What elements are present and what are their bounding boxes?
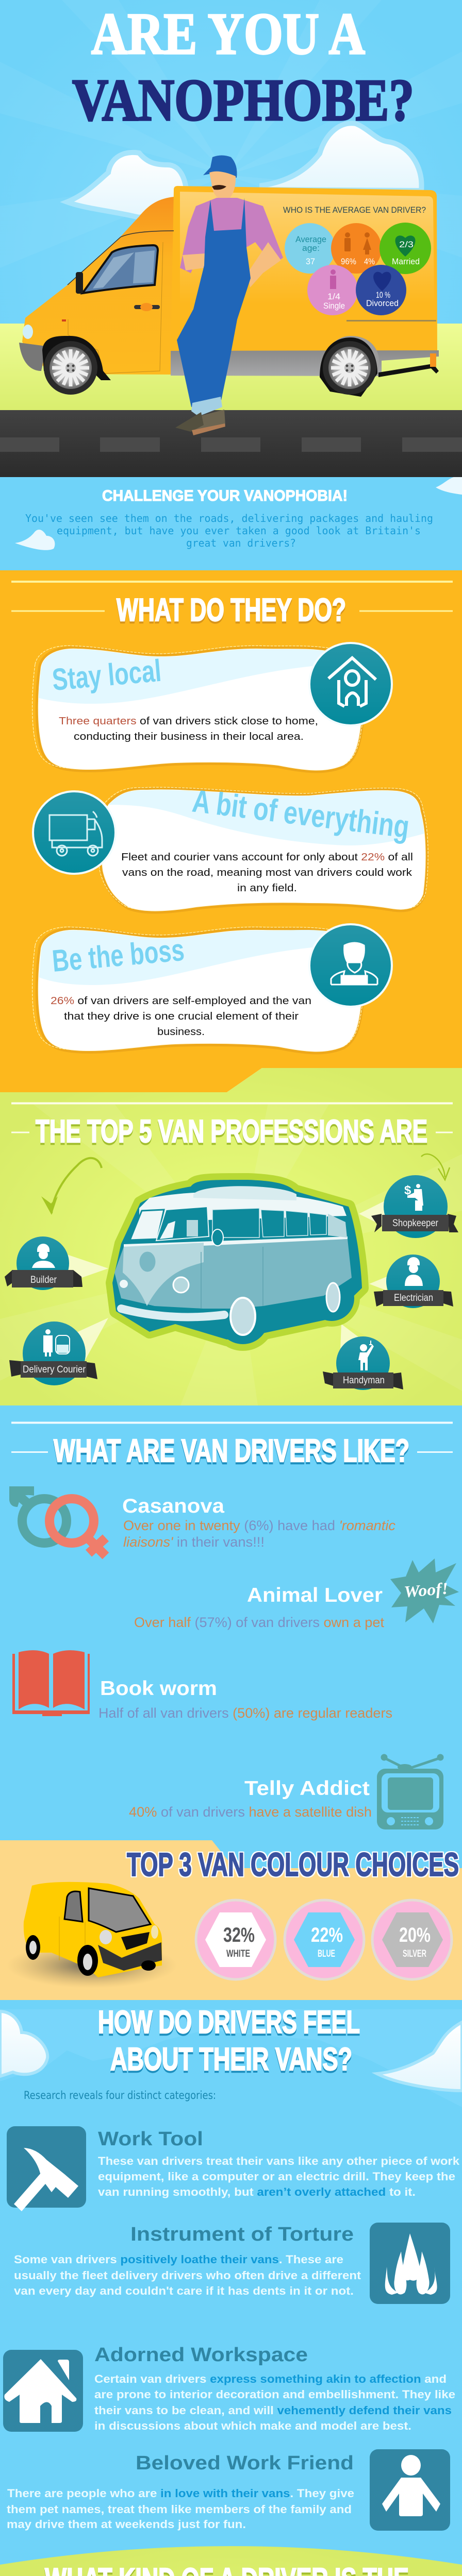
telly addict: 40% of van drivers have a satellite dish bbox=[129, 1804, 372, 1820]
stat: silver vans: SILVER bbox=[403, 1948, 426, 1959]
instrument of torture: van every day and couldn't care if it has dents in it or not. bbox=[14, 2284, 354, 2297]
telly addict: Telly Addict bbox=[244, 1777, 370, 1800]
section: top 5 van professions bbox=[0, 1068, 462, 1405]
casanova: Over one in twenty (6%) have had 'romantic bbox=[123, 1518, 396, 1533]
stat: gender split: 4% bbox=[364, 257, 375, 266]
book worm: Half of all van drivers (50%) are regular readers bbox=[98, 1705, 392, 1721]
profession: delivery courier: Delivery Courier bbox=[23, 1364, 86, 1375]
card text: stay local: conducting their business in their local area. bbox=[74, 731, 304, 742]
card text: stay local: Three quarters of van drivers stick close to home, bbox=[59, 716, 318, 727]
stat: single: 1/4 bbox=[327, 292, 340, 301]
heading: how do drivers feel: ABOUT THEIR VANS? bbox=[110, 2042, 352, 2077]
profession: shopkeeper: $ bbox=[404, 1183, 411, 1197]
card heading: stay local: Stay local bbox=[51, 653, 162, 697]
card: be the boss bbox=[32, 924, 392, 1051]
stat: average age: Average bbox=[295, 234, 326, 244]
van illustration bbox=[19, 186, 439, 397]
icon: house bbox=[3, 2350, 83, 2432]
van heading: who is the average van driver: WHO IS THE AVERAGE VAN DRIVER? bbox=[283, 205, 426, 215]
circle icon: house bbox=[309, 643, 392, 725]
heading: what do they do: WHAT DO THEY DO? bbox=[117, 592, 346, 628]
animal lover: Over half (57%) of van drivers own a pet bbox=[134, 1615, 384, 1630]
circle icon: truck bbox=[33, 791, 116, 874]
instrument of torture: Instrument of Torture bbox=[130, 2224, 354, 2245]
subheading: CHALLENGE YOUR VANOPHOBIA! bbox=[102, 487, 348, 504]
stat: white vans: 32% bbox=[223, 1924, 255, 1946]
profession: shopkeeper: Shopkeeper bbox=[392, 1218, 439, 1229]
stat: divorced bbox=[356, 265, 406, 315]
profession: handyman: Handyman bbox=[343, 1375, 385, 1386]
stat: single bbox=[307, 265, 358, 315]
adorned workspace: Certain van drivers express something akin to affection and bbox=[94, 2372, 447, 2385]
adorned workspace bbox=[94, 2344, 455, 2432]
intro text: You've seen see them on the roads, delivering packages and hauling bbox=[25, 512, 433, 524]
adorned workspace: in discussions about which make and model are best. bbox=[94, 2419, 411, 2432]
stat: married: Married bbox=[392, 257, 420, 266]
stat: gender split bbox=[331, 223, 382, 274]
van driver man bbox=[175, 156, 283, 435]
instrument of torture: Some van drivers positively loathe their vans . These are bbox=[14, 2253, 343, 2266]
profession: builder: Builder bbox=[30, 1275, 57, 1285]
woof burst: Woof! bbox=[403, 1579, 449, 1601]
work tool: van running smoothly, but aren’t overly attached to it. bbox=[98, 2185, 416, 2198]
stat: average age: age: bbox=[302, 243, 320, 253]
beloved work friend bbox=[7, 2452, 354, 2531]
card heading: be the boss: Be the boss bbox=[51, 933, 186, 978]
cloud: left bbox=[67, 152, 187, 217]
research note: Research reveals four distinct categories: bbox=[24, 2089, 216, 2102]
section: what do they do bbox=[0, 570, 462, 1092]
telly addict bbox=[129, 1777, 372, 1820]
arrow: right bbox=[421, 1154, 450, 1180]
book worm bbox=[98, 1677, 392, 1721]
stat: married: 2/3 bbox=[399, 240, 414, 249]
section: what are van drivers like bbox=[0, 1405, 462, 1869]
stat: gender split: 96% bbox=[341, 257, 356, 266]
adorned workspace: are prone to interior decoration and embellishment. They like bbox=[94, 2388, 455, 2401]
bus illustration bbox=[112, 1180, 362, 1344]
intro text: great van drivers? bbox=[186, 537, 296, 549]
card text: stay local bbox=[59, 716, 318, 742]
small cloud right bbox=[436, 477, 462, 495]
icon: person bbox=[370, 2449, 450, 2531]
icon: book bbox=[12, 1650, 90, 1716]
work tool: These van drivers treat their vans like any other piece of work bbox=[98, 2155, 460, 2167]
stat: single: Single bbox=[323, 301, 345, 311]
casanova bbox=[122, 1495, 396, 1550]
casanova: liaisons' in their vans!!! bbox=[123, 1534, 265, 1550]
beloved work friend: them pet names, treat them like members of the family and bbox=[7, 2503, 352, 2516]
road bbox=[0, 410, 462, 477]
title: are you a: ARE YOU A bbox=[91, 1, 365, 66]
icon: hammer bbox=[7, 2126, 86, 2211]
stat: blue vans: 22% bbox=[311, 1924, 343, 1946]
woof burst bbox=[390, 1558, 459, 1623]
work tool: Work Tool bbox=[98, 2128, 203, 2150]
icon: male and female symbols bbox=[9, 1486, 106, 1556]
icon: television bbox=[377, 1755, 443, 1829]
icon: flames bbox=[370, 2223, 450, 2304]
stat: average age: 37 bbox=[306, 257, 315, 266]
profession: electrician bbox=[374, 1255, 453, 1308]
cloud: left bbox=[0, 2011, 47, 2076]
card text: be the boss bbox=[51, 995, 311, 1038]
stat: white vans bbox=[196, 1900, 275, 1979]
casanova: Casanova bbox=[122, 1495, 224, 1517]
section: hero sky and road bbox=[0, 0, 462, 477]
small cloud left bbox=[15, 530, 55, 550]
card text: a bit of everything bbox=[121, 852, 413, 894]
beams bbox=[67, 1200, 387, 1360]
stat: divorced: 10 % bbox=[376, 290, 390, 300]
heading: how do drivers feel bbox=[98, 2005, 360, 2077]
stat: divorced: Divorced bbox=[366, 298, 399, 308]
intro text: equipment, but have you ever taken a good look at Britain's bbox=[57, 524, 421, 537]
card: stay local bbox=[31, 639, 392, 770]
section: how do drivers feel bbox=[0, 2000, 462, 2567]
profession: handyman bbox=[323, 1336, 403, 1390]
stat: blue vans bbox=[285, 1900, 364, 1979]
card text: be the boss: business. bbox=[157, 1026, 205, 1038]
stat: married bbox=[380, 223, 431, 274]
profession: electrician: Electrician bbox=[394, 1293, 433, 1303]
section: what kind of driver bbox=[0, 2546, 462, 2576]
beloved work friend: may drive them at weekends just for fun. bbox=[7, 2518, 246, 2531]
adorned workspace: their vans to be clean, and will vehemently defend their vans bbox=[94, 2404, 452, 2417]
instrument of torture: usually the fleet delivery drivers who often drive a different bbox=[14, 2269, 361, 2282]
stat: silver vans bbox=[372, 1900, 452, 1979]
profession: delivery courier bbox=[9, 1321, 97, 1385]
section: challenge your vanophobia bbox=[0, 477, 462, 570]
card: a bit of everything bbox=[33, 783, 428, 911]
yellow van illustration bbox=[7, 1882, 177, 1988]
stat: white vans: WHITE bbox=[226, 1948, 250, 1959]
card text: be the boss: 26% of van drivers are self-employed and the van bbox=[51, 995, 311, 1007]
section: top 3 van colours bbox=[0, 1840, 462, 2000]
grass bbox=[0, 324, 462, 410]
beloved work friend: Beloved Work Friend bbox=[136, 2452, 354, 2474]
beloved work friend: There are people who are in love with their vans . They give bbox=[7, 2487, 354, 2500]
adorned workspace: Adorned Workspace bbox=[94, 2344, 308, 2366]
card text: a bit of everything: vans on the road, meaning most van drivers could work bbox=[122, 867, 412, 878]
animal lover: Animal Lover bbox=[247, 1584, 383, 1606]
instrument of torture bbox=[14, 2224, 361, 2297]
profession: shopkeeper bbox=[371, 1175, 458, 1238]
circle icon: worker bbox=[309, 924, 392, 1007]
stat: average age bbox=[285, 223, 335, 274]
work tool: equipment, like a computer or an electric drill. They keep the bbox=[98, 2170, 455, 2183]
cloud: right bbox=[262, 123, 422, 191]
book worm: Book worm bbox=[100, 1677, 217, 1700]
card text: be the boss: that they drive is one crucial element of their bbox=[64, 1011, 299, 1022]
stat: silver vans: 20% bbox=[399, 1924, 431, 1946]
profession: builder bbox=[5, 1236, 82, 1290]
arrow: left bbox=[41, 1158, 102, 1215]
work tool bbox=[98, 2128, 460, 2198]
cloud: right bbox=[377, 2022, 462, 2091]
animal lover bbox=[134, 1584, 384, 1630]
card text: a bit of everything: in any field. bbox=[237, 883, 297, 894]
intro text bbox=[25, 512, 433, 549]
stat: blue vans: BLUE bbox=[318, 1948, 335, 1959]
card text: a bit of everything: Fleet and courier vans account for only about 22% of all bbox=[121, 852, 413, 863]
